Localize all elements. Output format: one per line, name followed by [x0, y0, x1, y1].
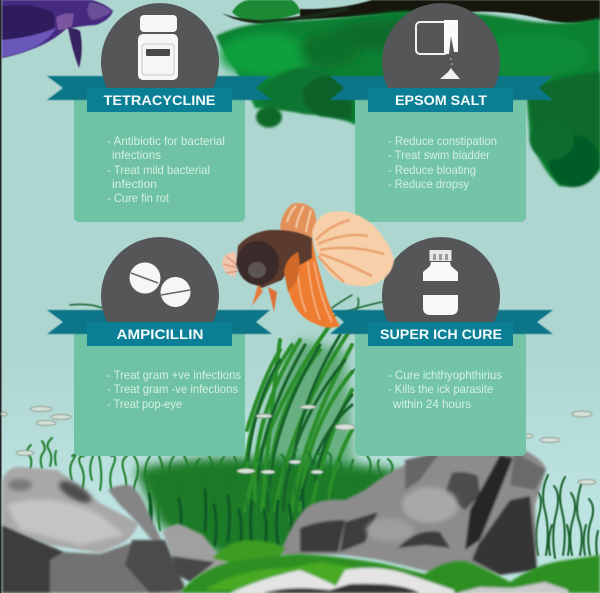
illustration: top foliage — [216, 0, 600, 187]
text block: - Antibiotic for bacterial — [107, 134, 225, 148]
panel: super ich cure — [330, 237, 553, 456]
icon circle — [382, 237, 500, 322]
text block — [107, 368, 241, 411]
panel: epsom salt — [330, 3, 553, 222]
card — [355, 329, 526, 456]
illustration: purple fish — [2, 0, 113, 68]
text block: - Reduce constipation — [388, 134, 497, 148]
heading: EPSOM SALT — [395, 92, 487, 108]
card — [355, 95, 526, 222]
heading: TETRACYCLINE — [104, 92, 216, 108]
panel: ampicillin — [47, 237, 272, 456]
icon circle — [101, 237, 219, 322]
icon: tablets — [130, 262, 190, 307]
icon circle — [101, 3, 219, 88]
ribbon tails — [47, 310, 272, 334]
panel: tetracycline — [47, 3, 272, 222]
text block: - Treat pop-eye — [107, 397, 182, 411]
text block — [388, 134, 497, 191]
illustration: betta fish — [222, 203, 394, 328]
card — [74, 95, 245, 222]
left edge — [0, 0, 2, 593]
text block: - Reduce bloating — [388, 163, 476, 177]
illustration: small fish — [1, 405, 596, 484]
banner — [87, 88, 232, 112]
illustration: rocks — [2, 448, 546, 593]
text block: infections — [112, 148, 161, 162]
icon: salt pouring from box — [416, 20, 460, 79]
text block: - Cure fin rot — [107, 191, 170, 205]
icon: medicine bottle — [423, 250, 458, 315]
text block: - Cure ichthyophthirius — [388, 368, 502, 382]
banner — [368, 322, 513, 346]
text block: - Reduce dropsy — [388, 177, 469, 191]
icon: pill bottle — [138, 15, 178, 80]
ribbon tails — [47, 76, 272, 100]
illustration: seaweed — [27, 295, 598, 558]
text block: within 24 hours — [392, 397, 471, 411]
illustration: moss and stones — [180, 540, 600, 593]
heading: AMPICILLIN — [116, 326, 204, 342]
text block: - Kills the ick parasite — [388, 382, 493, 396]
text block: - Treat mild bacterial — [107, 163, 210, 177]
text block: infection — [112, 177, 157, 191]
text block: - Treat gram +ve infections — [107, 368, 241, 382]
ribbon tails — [330, 76, 553, 100]
banner — [368, 88, 513, 112]
heading: SUPER ICH CURE — [380, 326, 502, 342]
ribbon tails — [330, 310, 553, 334]
text block — [107, 134, 225, 205]
card — [74, 329, 245, 456]
text block — [388, 368, 502, 411]
banner — [87, 322, 232, 346]
icon circle — [382, 3, 500, 88]
text block: - Treat swim bladder — [388, 148, 490, 162]
text block: - Treat gram -ve infections — [107, 382, 238, 396]
